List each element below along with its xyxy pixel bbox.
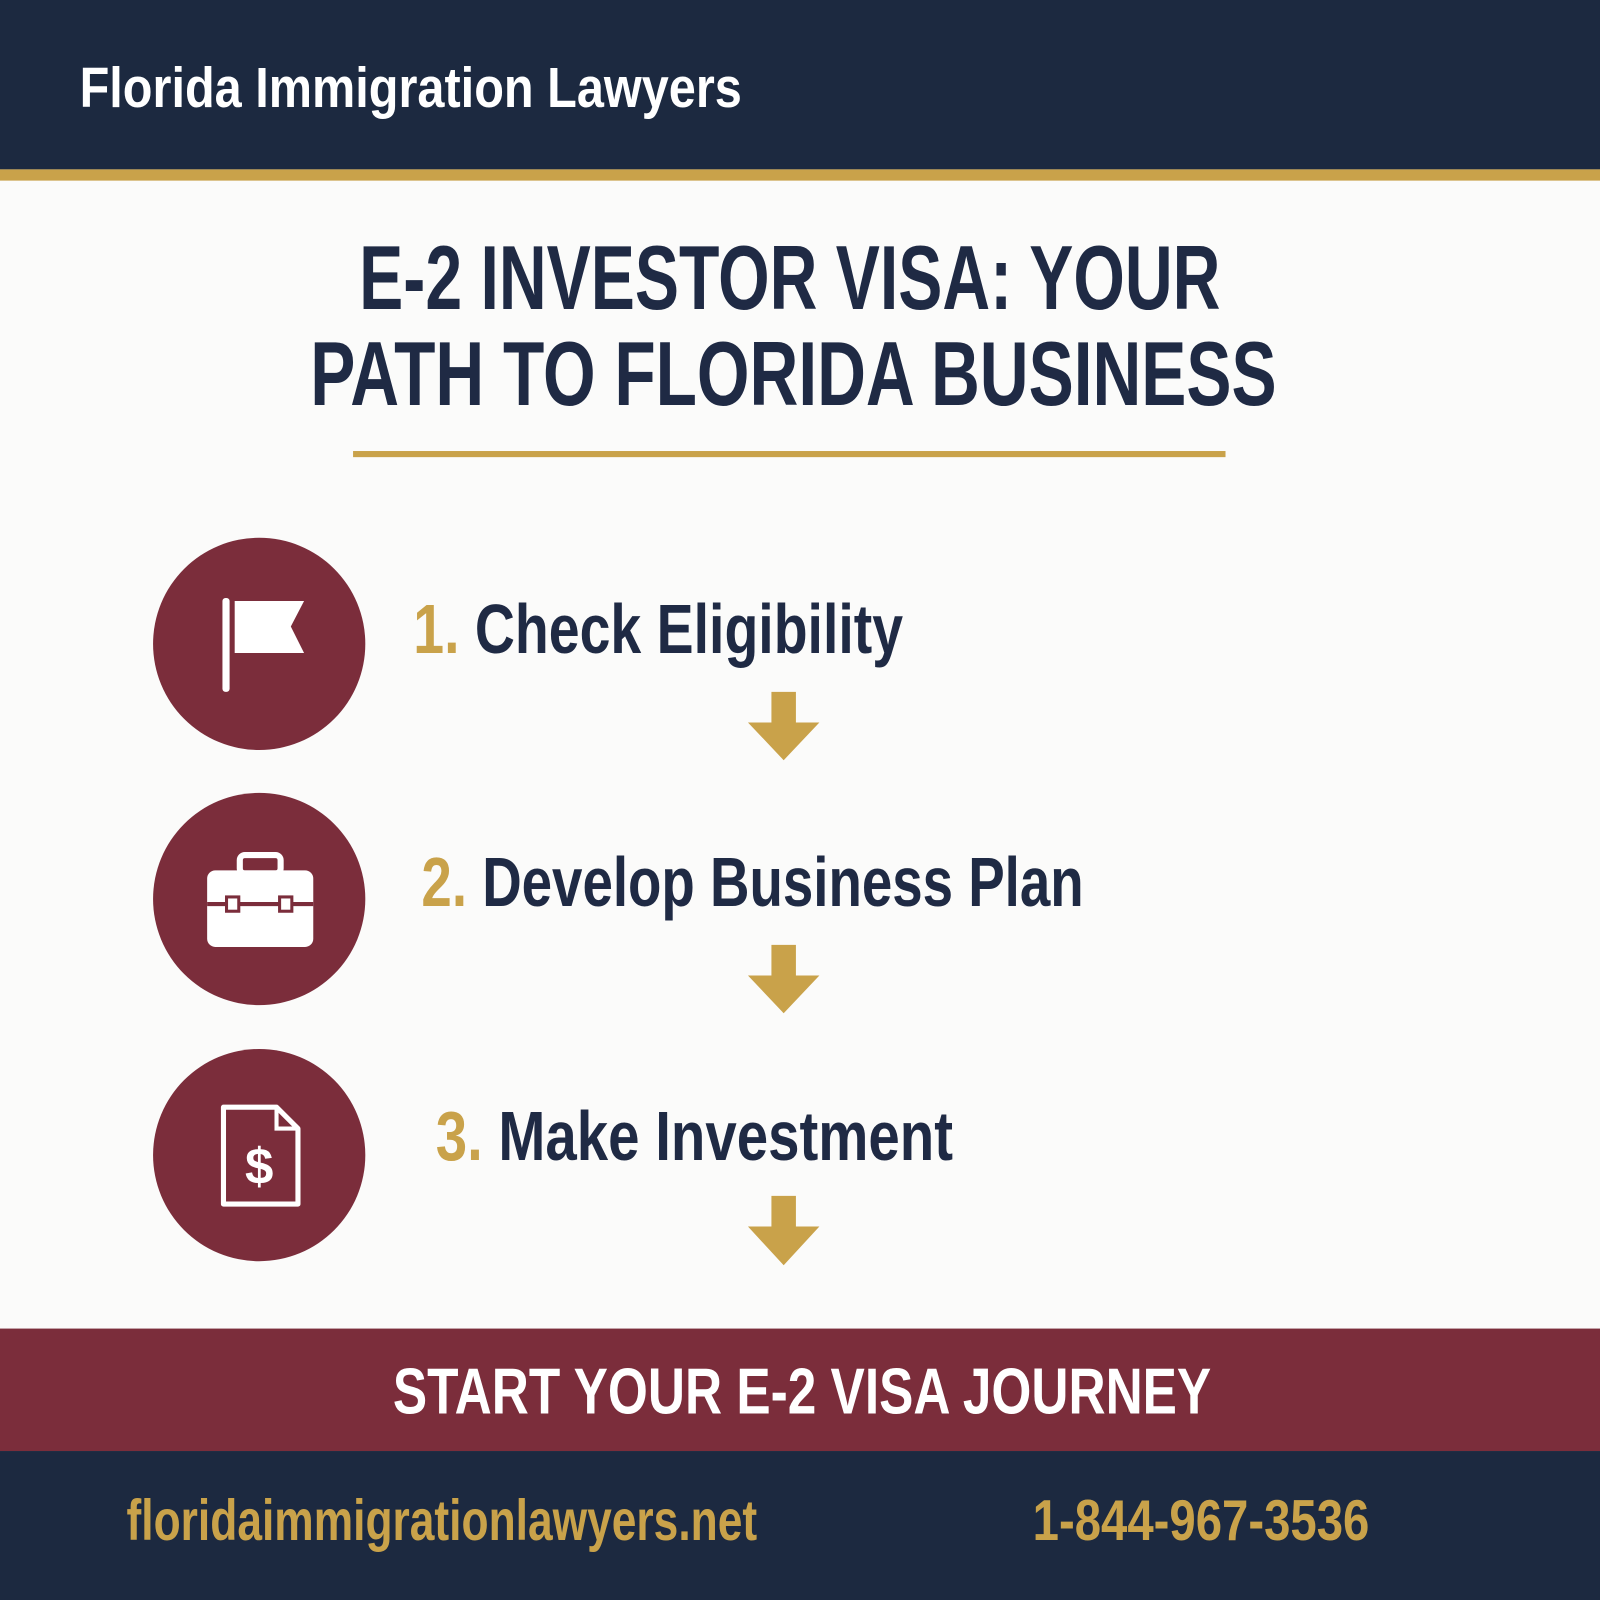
call to action band [0, 1329, 1600, 1451]
icon: flag [153, 538, 365, 750]
title: E-2 INVESTOR VISA: YOUR [359, 228, 1220, 329]
title [310, 228, 1277, 425]
title: PATH TO FLORIDA BUSINESS [310, 324, 1277, 425]
footer [0, 1451, 1600, 1600]
step 1 label: 1. Check Eligibility [413, 590, 903, 668]
footer phone: 1-844-967-3536 [1033, 1489, 1369, 1553]
arrow 2 [748, 945, 819, 1013]
step 1 [153, 538, 903, 750]
title underline [353, 451, 1226, 457]
arrow 1 [748, 692, 819, 760]
step 3 [153, 1049, 953, 1261]
icon: briefcase [153, 793, 365, 1005]
header text: Florida Immigration Lawyers [80, 56, 742, 119]
icon: document dollar: $ [245, 1138, 273, 1195]
icon: document dollar [153, 1049, 365, 1261]
arrow 3 [748, 1196, 819, 1265]
step 2 label: 2. Develop Business Plan [421, 843, 1084, 921]
call to action band: START YOUR E-2 VISA JOURNEY [393, 1354, 1211, 1427]
step 2 [153, 793, 1084, 1005]
header bar [0, 0, 1600, 181]
step 3 label: 3. Make Investment [436, 1097, 953, 1175]
footer url: floridaimmigrationlawyers.net [127, 1489, 757, 1553]
